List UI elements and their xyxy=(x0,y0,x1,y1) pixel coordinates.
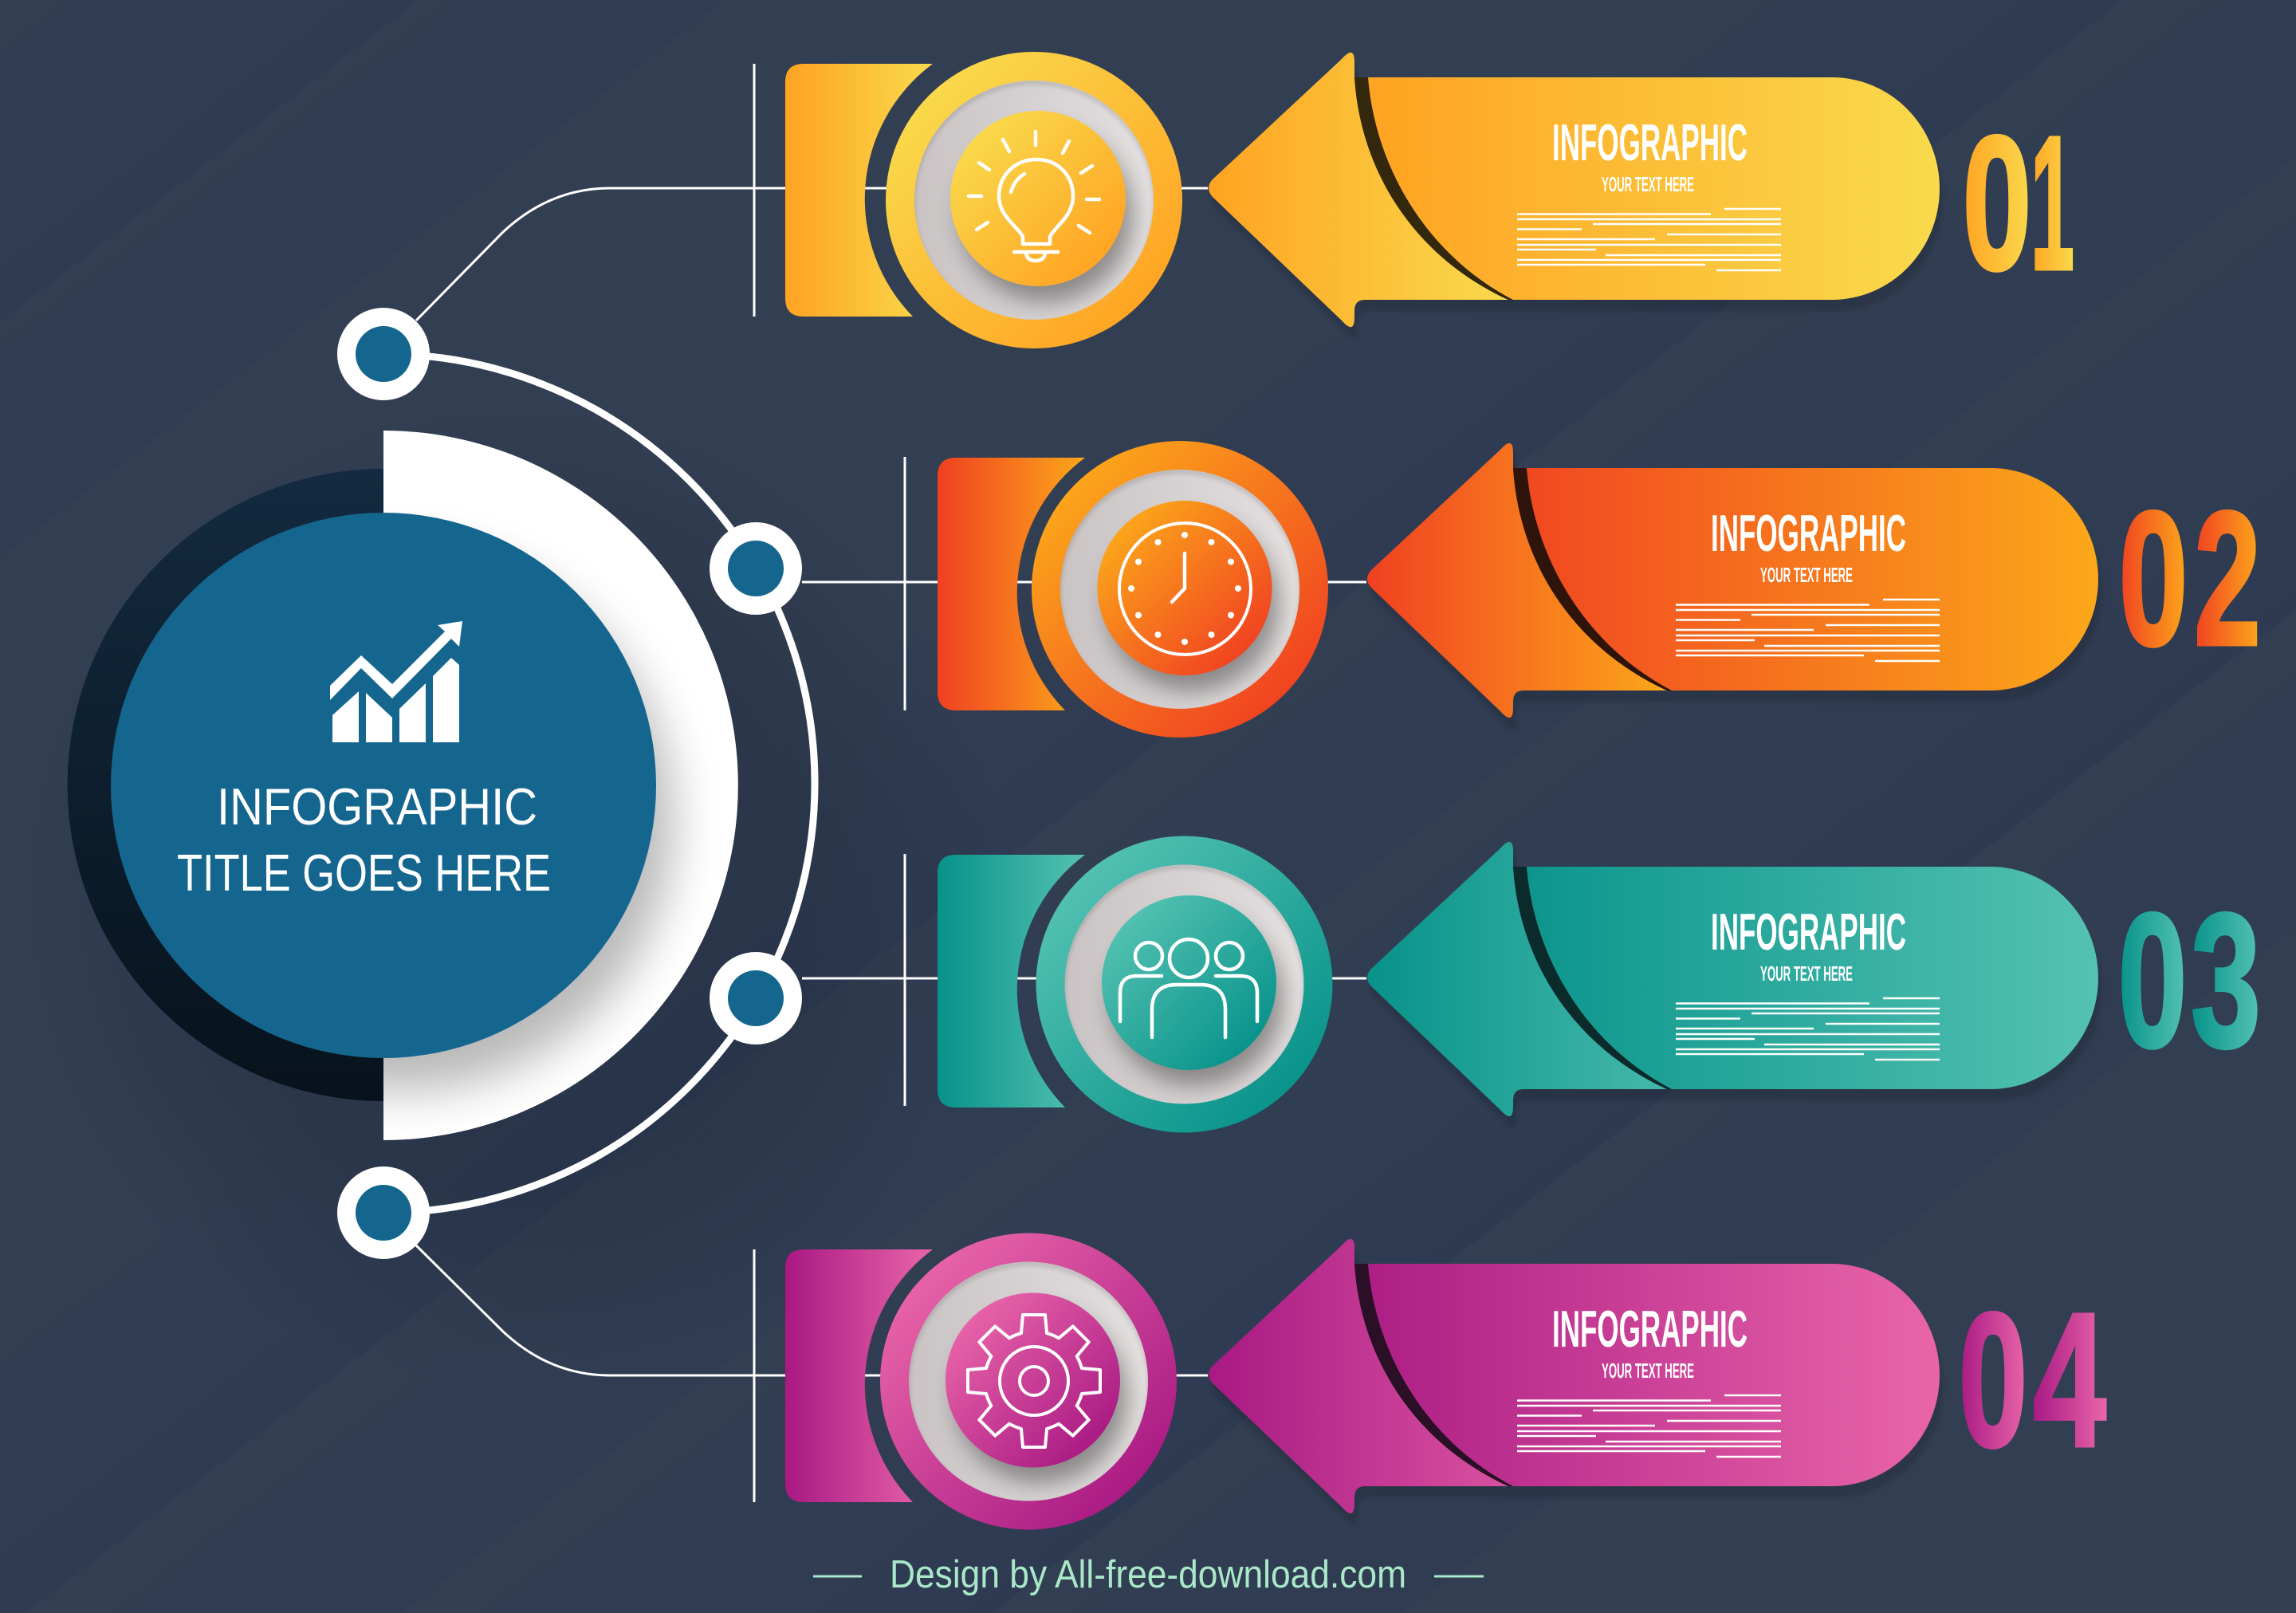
side block xyxy=(938,458,1085,710)
outer ring with nodes xyxy=(337,308,815,1259)
arrow fold xyxy=(1354,77,1513,300)
node 4 xyxy=(337,1166,430,1259)
text placeholder lines xyxy=(1676,998,1940,1060)
number 02: 0 xyxy=(2119,472,2188,686)
arrow body xyxy=(1368,77,1940,300)
side block xyxy=(785,64,933,317)
arrow fold xyxy=(1513,468,1672,690)
arrow shadow xyxy=(1212,64,1943,338)
arrow body xyxy=(1527,867,2098,1089)
number 04: 4 xyxy=(2033,1273,2106,1486)
arrow heading: INFOGRAPHIC xyxy=(1552,1300,1748,1358)
arrow shadow xyxy=(1212,1250,1943,1524)
arrow heading: INFOGRAPHIC xyxy=(1552,113,1748,171)
node 2 xyxy=(710,522,802,615)
arrow fold xyxy=(1354,1264,1513,1486)
number 03: 0 xyxy=(2117,874,2188,1088)
panel: row 01 yellow xyxy=(785,52,2074,348)
hub blue disc xyxy=(111,513,656,1058)
number 01: 0 xyxy=(1963,96,2031,309)
arrow xyxy=(1209,53,1943,338)
icon: light bulb xyxy=(969,132,1099,261)
node 3 xyxy=(710,952,802,1045)
panel: row 04 pink xyxy=(785,1233,2106,1529)
text: 1 xyxy=(2031,96,2074,309)
arrow body xyxy=(1368,1264,1940,1486)
arrow subheading: YOUR TEXT HERE xyxy=(1760,563,1853,587)
hub title xyxy=(177,777,551,902)
node 1 xyxy=(337,308,430,400)
text placeholder lines xyxy=(1517,1395,1781,1457)
number 04: 0 xyxy=(1958,1273,2028,1486)
number 03: 3 xyxy=(2191,874,2261,1088)
hub title: INFOGRAPHIC xyxy=(217,777,537,836)
side block xyxy=(785,1249,933,1502)
arrow xyxy=(1367,443,2101,729)
arrow subheading: YOUR TEXT HERE xyxy=(1602,172,1694,196)
side block xyxy=(938,855,1085,1107)
arrow body xyxy=(1527,468,2098,690)
text placeholder lines xyxy=(1676,600,1940,661)
arrow heading: INFOGRAPHIC xyxy=(1711,504,1906,562)
hub inner shadow xyxy=(383,553,698,1116)
hub dark half disc xyxy=(68,469,383,1101)
connector lines and vertical ticks xyxy=(416,64,1366,1502)
arrow heading: INFOGRAPHIC xyxy=(1711,903,1906,961)
arrow head xyxy=(1367,842,1667,1116)
footer credit: Design by All-free-download.com xyxy=(890,1553,1406,1596)
medallion xyxy=(1032,441,1328,738)
icon: rising chart xyxy=(330,621,462,742)
medallion xyxy=(886,52,1182,348)
arrow head xyxy=(1367,443,1667,718)
panel: row 03 teal xyxy=(938,836,2261,1132)
arrow subheading: YOUR TEXT HERE xyxy=(1760,962,1853,986)
arrow shadow xyxy=(1370,853,2101,1127)
arrow xyxy=(1367,842,2101,1127)
arrow xyxy=(1209,1239,1943,1524)
icon: clock xyxy=(1119,523,1251,655)
icon: gear xyxy=(968,1315,1100,1447)
central hub xyxy=(68,431,738,1140)
arrow head xyxy=(1209,53,1508,327)
ring arc xyxy=(383,354,815,1213)
arrow head xyxy=(1209,1239,1508,1513)
hub title: TITLE GOES HERE xyxy=(177,844,551,902)
icon: people xyxy=(1120,939,1257,1037)
panel: row 02 orange xyxy=(938,441,2261,738)
medallion xyxy=(1036,836,1333,1132)
arrow subheading: YOUR TEXT HERE xyxy=(1602,1359,1694,1383)
hub white half disc xyxy=(383,431,738,1140)
medallion xyxy=(880,1233,1177,1529)
arrow fold xyxy=(1513,867,1672,1089)
arrow shadow xyxy=(1370,454,2101,729)
text placeholder lines xyxy=(1517,209,1781,270)
